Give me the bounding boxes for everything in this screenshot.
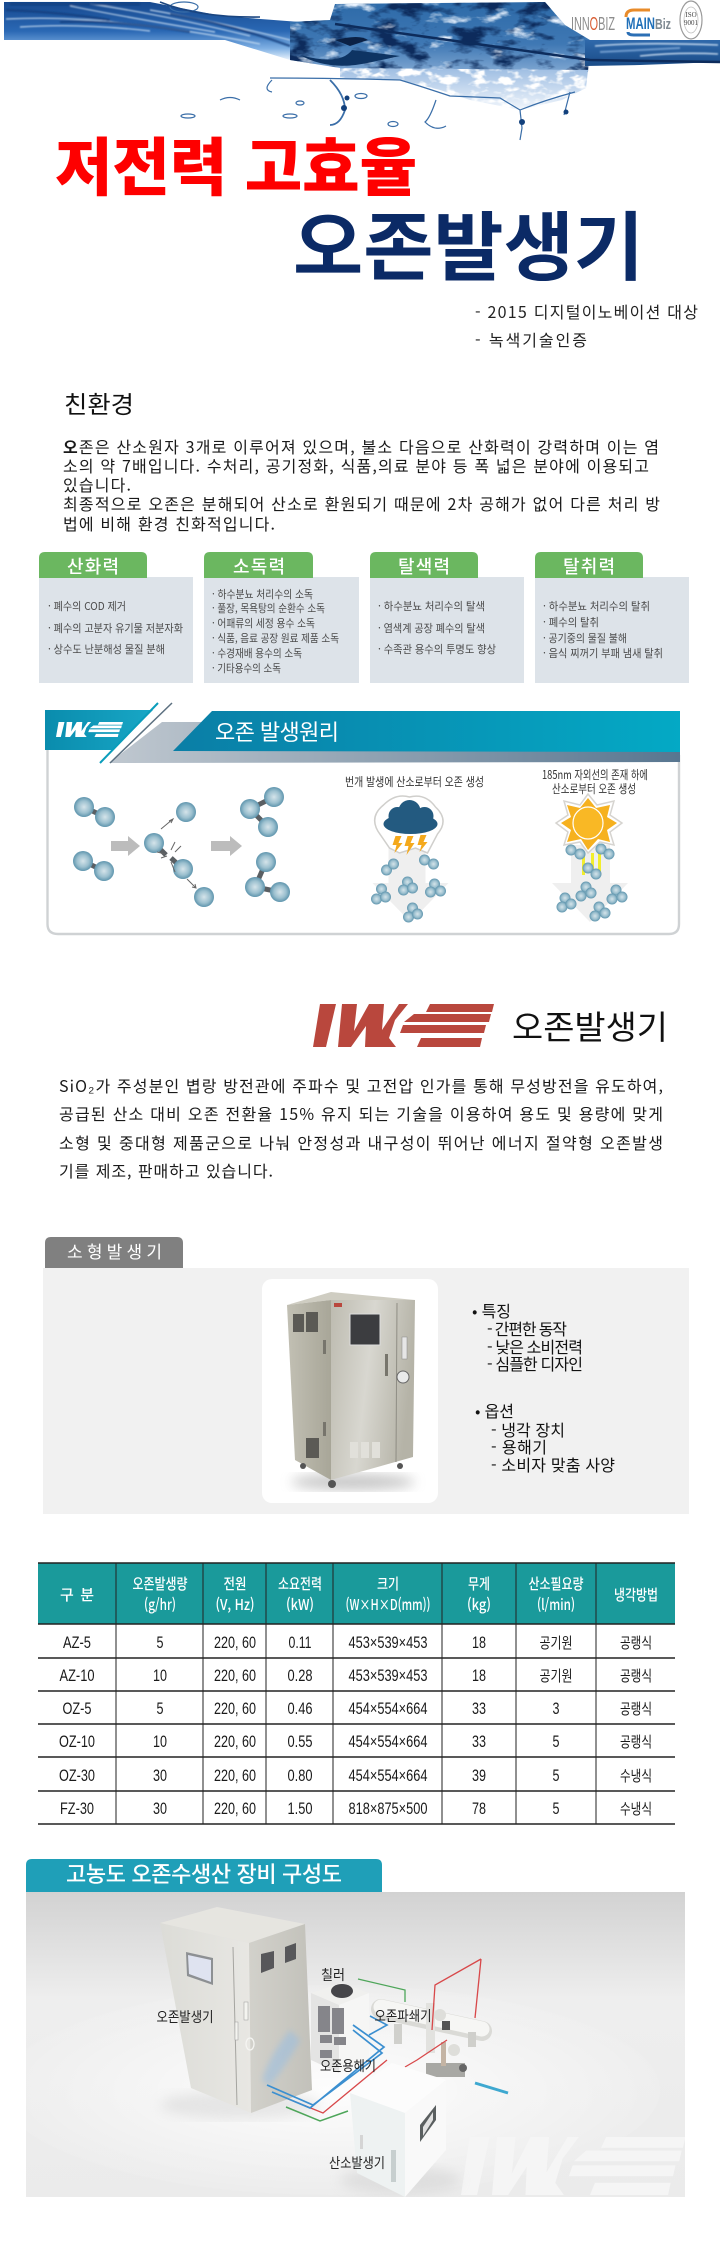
text block: product description xyxy=(59,1073,663,1182)
panel: ozone generation principle xyxy=(45,703,680,934)
table rows: 220, 60 xyxy=(214,1666,256,1685)
text block: eco-friendly description: 법에 비해 환경 친화적입니다. xyxy=(63,511,275,535)
table: specifications xyxy=(38,1563,675,1824)
table rows: 453×539×453 xyxy=(348,1666,428,1685)
logo: INNOBIZ: INNOBIZ xyxy=(571,14,615,34)
panel: small generator xyxy=(43,1237,689,1514)
panel: 탈취력 xyxy=(535,552,689,683)
table rows: 공기원 xyxy=(540,1632,572,1653)
oxygen generator xyxy=(350,2063,446,2197)
table rows: 220, 60 xyxy=(214,1799,256,1818)
panel: high-concentration ozone water equipment xyxy=(0,1857,720,2237)
logo: MAINBiz: Biz xyxy=(655,16,671,33)
table rows: 30 xyxy=(153,1799,167,1818)
panel: 소독력: · 기타용수의 소독 xyxy=(212,660,281,676)
table rows xyxy=(59,1632,652,1819)
pipes xyxy=(267,1959,508,2121)
table rows: 453×539×453 xyxy=(348,1633,428,1652)
table rows: 공기원 xyxy=(540,1665,572,1686)
diagram: UV ozone generation xyxy=(552,794,628,922)
panel: 소독력: 소독력 xyxy=(233,553,285,579)
caption: lightning: 번개 발생에 산소로부터 오존 생성 xyxy=(345,773,484,790)
text block: product description: 소형 및 중대형 제품군으로 나눠 안정성과 내구성이 뛰어난 에너지 절약형 오존발생 xyxy=(59,1130,663,1154)
panel: 탈취력: · 공기중의 물질 불해 xyxy=(543,630,627,646)
caption: ultraviolet: 산소로부터 오존 생성 xyxy=(552,780,636,797)
table rows: 공랭식 xyxy=(620,1665,652,1686)
product photo: small ozone generator xyxy=(287,1292,415,1490)
table rows: 5 xyxy=(156,1633,164,1652)
table rows: 220, 60 xyxy=(214,1766,256,1785)
panel: 소독력 xyxy=(204,552,359,683)
equipment labels: 칠러 xyxy=(321,1965,345,1985)
table header: 산소필요량 xyxy=(528,1573,584,1594)
table header: (l/min) xyxy=(537,1594,575,1615)
table rows: 5 xyxy=(552,1799,560,1818)
text block: options: - 냉각 장치 xyxy=(491,1417,565,1441)
text block: options: • 옵션 xyxy=(475,1398,514,1422)
water splash banner xyxy=(4,2,720,140)
panel: 소독력: · 풀장, 목욕탕의 순환수 소독 xyxy=(212,600,325,616)
text block: features: - 심플한 디자인 xyxy=(487,1351,583,1375)
text block: product description: 기를 제조, 판매하고 있습니다. xyxy=(59,1158,273,1182)
table header: 크기 xyxy=(377,1573,399,1594)
table rows: 10 xyxy=(153,1666,167,1685)
equipment labels: 오존발생기 xyxy=(156,2007,214,2027)
tab: heading: 고농도 오존수생산 장비 구성도 xyxy=(66,1857,342,1889)
text block: features: - 낮은 소비전력 xyxy=(487,1334,583,1358)
table header: (kW) xyxy=(286,1594,314,1615)
title: 오존발생기: 오존발생기 xyxy=(293,187,644,296)
table header: 전원 xyxy=(224,1573,246,1594)
table rows: 0.28 xyxy=(288,1666,312,1685)
table rows: 0.46 xyxy=(288,1699,312,1718)
table rows: 공랭식 xyxy=(620,1632,652,1653)
panel: 탈취력: · 음식 찌꺼기 부패 냄새 탈취 xyxy=(543,645,663,661)
table rows: 18 xyxy=(472,1666,486,1685)
table rows: FZ-30 xyxy=(60,1799,94,1818)
table rows: 818×875×500 xyxy=(348,1799,428,1818)
text block: eco-friendly description: 있습니다. xyxy=(63,472,131,496)
table rows: 10 xyxy=(153,1732,167,1751)
table rows: 454×554×664 xyxy=(348,1699,428,1718)
panel: 탈색력: · 염색계 공장 폐수의 탈색 xyxy=(378,620,485,636)
logo: ISO 9001 seal: 9001 xyxy=(684,19,698,27)
diagram: oxygen molecules splitting xyxy=(73,787,290,907)
award lines: - 2015 디지털이노베이션 대상 xyxy=(475,299,698,323)
panel: 소독력: · 식품, 음료 공장 원료 제품 소독 xyxy=(212,630,339,646)
heading: 친환경: 친환경 xyxy=(64,385,134,420)
tab: 소형발생기 xyxy=(45,1237,183,1268)
panel: 산화력: · 폐수의 COD 제거 xyxy=(48,598,126,614)
table header: 소요전력 xyxy=(278,1573,322,1594)
table header: (V, Hz) xyxy=(216,1594,254,1615)
panel: 탈색력: 탈색력 xyxy=(398,553,450,579)
table header: 냉각방법 xyxy=(614,1584,658,1605)
panel: 산화력: · 상수도 난분해성 물질 분해 xyxy=(48,641,165,657)
panel: 소독력: · 하수분뇨 처리수의 소독 xyxy=(212,586,313,602)
diagram: lightning ozone generation xyxy=(371,796,448,922)
equipment labels: 오존용해기 xyxy=(320,2056,376,2076)
table rows: 0.55 xyxy=(288,1732,312,1751)
table rows: 78 xyxy=(472,1799,486,1818)
table rows: 0.11 xyxy=(288,1633,312,1652)
table rows: AZ-5 xyxy=(63,1633,91,1652)
table rows: 5 xyxy=(156,1699,164,1718)
panel: 탈취력: · 폐수의 탈취 xyxy=(543,614,599,630)
text block: eco-friendly description: 최종적으로 오존은 분해되어 산소로 환원되기 때문에 2차 공해가 없어 다른 처리 방 xyxy=(63,491,660,515)
heading: 오존발생기: 오존발생기 xyxy=(512,1001,668,1049)
panel: 산화력: · 폐수의 고분자 유기물 저분자화 xyxy=(48,620,183,636)
table rows: 220, 60 xyxy=(214,1732,256,1751)
text block: options: - 소비자 맞춤 사양 xyxy=(491,1452,615,1476)
table rows: 공랭식 xyxy=(620,1698,652,1719)
table rows: 공랭식 xyxy=(620,1731,652,1752)
text block: product description: SiO₂가 주성분인 볍랑 방전관에 주파수 및 고전압 인가를 통해 무성방전을 유도하여, xyxy=(59,1073,663,1097)
text block: features: - 간편한 동작 xyxy=(487,1316,567,1340)
text block: product description: 공급된 산소 대비 오존 전환율 15% 유지 되는 기술을 이용하여 용도 및 용량에 맞게 xyxy=(59,1101,663,1125)
table header: (kg) xyxy=(467,1594,491,1615)
logo: ISO 9001 seal xyxy=(680,1,702,39)
equipment illustration xyxy=(156,1907,508,2197)
heading: 오존 발생원리: 오존 발생원리 xyxy=(215,715,339,747)
table header: (g/hr) xyxy=(144,1594,176,1615)
table header: 무게 xyxy=(468,1573,490,1594)
ozone generator cabinet xyxy=(160,1907,312,2113)
panel: 탈색력: · 수족관 용수의 투명도 향상 xyxy=(378,641,496,657)
table rows: 33 xyxy=(472,1732,486,1751)
logo: IW red xyxy=(313,1004,494,1047)
table rows: 5 xyxy=(552,1766,560,1785)
table rows: 5 xyxy=(552,1732,560,1751)
text block: options xyxy=(475,1398,615,1476)
logo: IW white xyxy=(56,722,123,737)
logo: ISO 9001 seal: ISO xyxy=(685,11,697,19)
table rows: 1.50 xyxy=(288,1799,312,1818)
panel: 탈취력: 탈취력 xyxy=(563,553,615,579)
table rows: 30 xyxy=(153,1766,167,1785)
panel: 산화력: 산화력 xyxy=(67,553,119,579)
table rows: OZ-5 xyxy=(62,1699,92,1718)
table rows: 18 xyxy=(472,1633,486,1652)
table header: 오존발생량 xyxy=(132,1573,188,1594)
award lines xyxy=(475,299,698,351)
table rows: OZ-10 xyxy=(59,1732,95,1751)
title: 저전력 고효율: 저전력 고효율 xyxy=(55,118,417,209)
table rows: 454×554×664 xyxy=(348,1732,428,1751)
table rows: AZ-10 xyxy=(60,1666,94,1685)
watermark: IW xyxy=(461,2137,685,2195)
equipment labels: 오존파쇄기 xyxy=(374,2006,432,2026)
table header: (W×H×D(mm)) xyxy=(346,1594,430,1615)
table rows: 220, 60 xyxy=(214,1633,256,1652)
table rows: OZ-30 xyxy=(59,1766,95,1785)
panel: 산화력 xyxy=(39,552,193,683)
table rows: 220, 60 xyxy=(214,1699,256,1718)
text block: features: • 특징 xyxy=(472,1298,511,1322)
text block: eco-friendly description: 오존은 산소원자 3개로 이루어져 있으며, 불소 다음으로 산화력이 강력하며 이는 염 xyxy=(63,434,659,458)
text block: features xyxy=(472,1298,583,1375)
tab: 소형발생기: 소형발생기 xyxy=(67,1238,162,1263)
award lines: - 녹색기술인증 xyxy=(475,327,587,351)
table rows: 수냉식 xyxy=(620,1765,652,1786)
caption: ultraviolet xyxy=(542,766,648,797)
ozone destructor and injector xyxy=(381,2003,482,2077)
equipment labels: 산소발생기 xyxy=(329,2153,385,2173)
table rows: 0.80 xyxy=(288,1766,312,1785)
panel: 탈색력: · 하수분뇨 처리수의 탈색 xyxy=(378,598,485,614)
equipment labels xyxy=(156,1965,432,2173)
table rows: 3 xyxy=(552,1699,560,1718)
caption: ultraviolet: 185nm 자외선의 존재 하에 xyxy=(542,766,648,783)
logo: MAINBiz: MAIN xyxy=(626,14,655,33)
text block: eco-friendly description: 소의 약 7배입니다. 수처리, 공기정화, 식품,의료 분야 등 폭 넓은 분야에 이용되고 xyxy=(63,453,649,477)
panel: 탈색력 xyxy=(370,552,524,683)
panel: 소독력: · 수경재배 용수의 소독 xyxy=(212,645,302,661)
text block: options: - 용해기 xyxy=(491,1434,547,1458)
table rows: 39 xyxy=(472,1766,486,1785)
table header xyxy=(38,1563,675,1624)
table rows: 33 xyxy=(472,1699,486,1718)
panel: 소독력: · 어패류의 세정 용수 소독 xyxy=(212,615,315,631)
table rows: 454×554×664 xyxy=(348,1766,428,1785)
table rows: 수냉식 xyxy=(620,1798,652,1819)
chiller xyxy=(311,1983,369,2073)
panel: 탈취력: · 하수분뇨 처리수의 탈취 xyxy=(543,598,650,614)
text block: eco-friendly description xyxy=(63,434,660,535)
table header: 구 분 xyxy=(60,1584,94,1605)
